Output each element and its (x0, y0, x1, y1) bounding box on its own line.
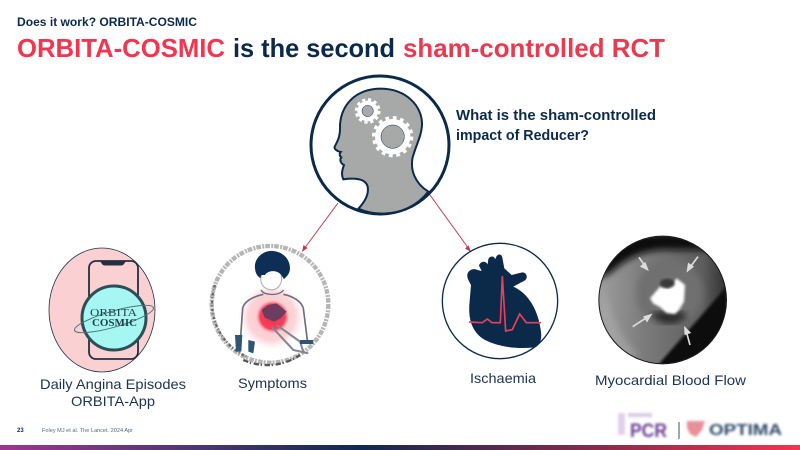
label: daily angina episodes (40, 376, 186, 409)
divider between logos (678, 422, 680, 439)
slide number: 23 (17, 428, 24, 434)
icon: head with gears (311, 76, 449, 214)
kicker heading: Does it work? ORBITA-COSMIC (17, 17, 197, 29)
footer gradient bar (0, 445, 800, 450)
title: sham-controlled RCT (403, 33, 665, 63)
question text (456, 107, 656, 144)
arrow: head to ischaemia (430, 195, 471, 252)
title (17, 33, 665, 63)
image: myocardial perfusion scan (597, 233, 730, 367)
icon: phone with ORBITA-COSMIC logo (49, 248, 156, 372)
title: ORBITA-COSMIC (17, 33, 225, 63)
citation: Foley MJ et al. The Lancet. 2024 Apr (42, 428, 133, 434)
label: symptoms: Symptoms (238, 375, 307, 391)
logo: PCR (618, 413, 667, 442)
icon: heart with ECG (442, 243, 558, 359)
logo: OPTIMA: OPTIMA (709, 422, 783, 439)
icon: person with chest pain (212, 246, 328, 365)
label: daily angina episodes: ORBITA-App (71, 393, 155, 409)
icon: phone with ORBITA-COSMIC logo: COSMIC (92, 318, 137, 329)
logo: PCR: PCR (630, 421, 667, 442)
arrow: head to symptoms (302, 203, 338, 252)
logo: OPTIMA (687, 421, 783, 439)
title: is the second (233, 33, 395, 63)
question text: What is the sham-controlled (456, 107, 656, 124)
question text: impact of Reducer? (456, 127, 589, 144)
label: ischaemia: Ischaemia (470, 370, 536, 386)
label: myocardial blood flow: Myocardial Blood Flow (595, 372, 747, 388)
icon: phone with ORBITA-COSMIC logo: ORBITA (90, 307, 137, 319)
label: daily angina episodes: Daily Angina Episodes (40, 376, 186, 392)
